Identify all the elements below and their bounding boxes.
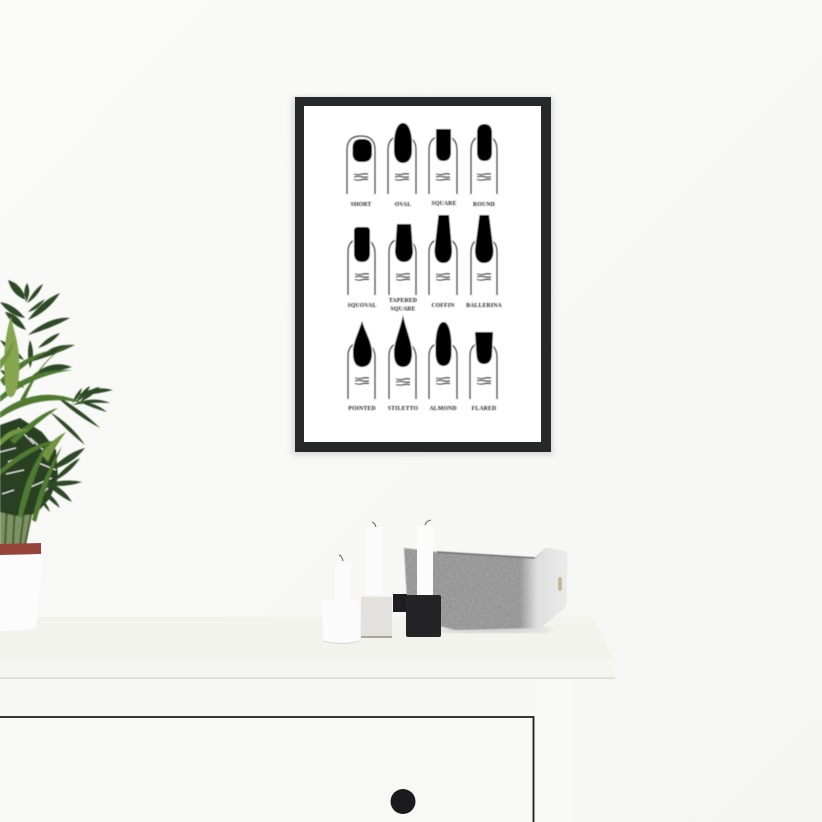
dresser leg (536, 680, 573, 822)
candle holders (323, 520, 441, 644)
nail: flared (470, 332, 497, 412)
gaps between leaves (0, 428, 56, 498)
olive leaf highlights (0, 340, 66, 462)
nail: tapered square (389, 224, 417, 312)
nail: ballerina (466, 215, 503, 309)
nail: coffin (429, 215, 457, 309)
nail: round (471, 124, 497, 208)
dark palm leaves (0, 280, 113, 512)
mid green arching leaves (0, 345, 86, 522)
nail: oval (388, 123, 416, 208)
potted palm plant (0, 280, 113, 631)
label: almond: ALMOND (429, 406, 457, 412)
basket body (404, 548, 567, 630)
label: pointed: POINTED (348, 406, 376, 412)
drawer knob (390, 789, 416, 814)
drawer front (0, 718, 533, 822)
white pot (0, 554, 43, 631)
label: squoval: SQUOVAL (348, 303, 376, 309)
label: coffin: COFFIN (431, 303, 455, 309)
candle: front white (323, 555, 360, 644)
candle: black holder (393, 520, 441, 637)
basket rim (437, 552, 535, 558)
pot rim (0, 543, 41, 556)
white poster paper (304, 106, 541, 442)
nail: short (347, 136, 375, 208)
felt basket (404, 548, 567, 632)
basket button (558, 577, 562, 591)
nail: pointed (348, 321, 376, 412)
label: oval: OVAL (395, 202, 411, 208)
stem shadows (5, 505, 33, 545)
label: round: ROUND (473, 202, 495, 208)
nail: almond (429, 322, 457, 412)
light green leaf (4, 316, 19, 397)
label: stiletto: STILETTO (388, 406, 419, 412)
label: ballerina: BALLERINA (466, 303, 503, 309)
frame shadow (292, 97, 553, 455)
dresser body (0, 678, 573, 822)
nail: square (429, 129, 457, 207)
label: tapered square: SQUARE (390, 306, 416, 312)
basket contact shadow (428, 628, 552, 632)
dark foliage mass (0, 418, 58, 516)
nail: stiletto (388, 315, 419, 412)
label: short: SHORT (351, 202, 371, 208)
plant stems (0, 505, 34, 545)
nail chart (347, 123, 503, 412)
basket light end (520, 548, 567, 628)
candle: middle (361, 522, 392, 638)
dresser (0, 617, 615, 822)
drawer gap (0, 717, 534, 822)
black frame (295, 97, 551, 452)
framed poster (292, 97, 553, 455)
countertop surface (0, 617, 615, 678)
label: tapered square: TAPERED (389, 298, 417, 304)
countertop front edge (0, 660, 615, 677)
counter edge shadow (0, 678, 615, 679)
label: flared: FLARED (472, 406, 496, 412)
label: square: SQUARE (431, 201, 457, 207)
nail: squoval (348, 227, 376, 309)
